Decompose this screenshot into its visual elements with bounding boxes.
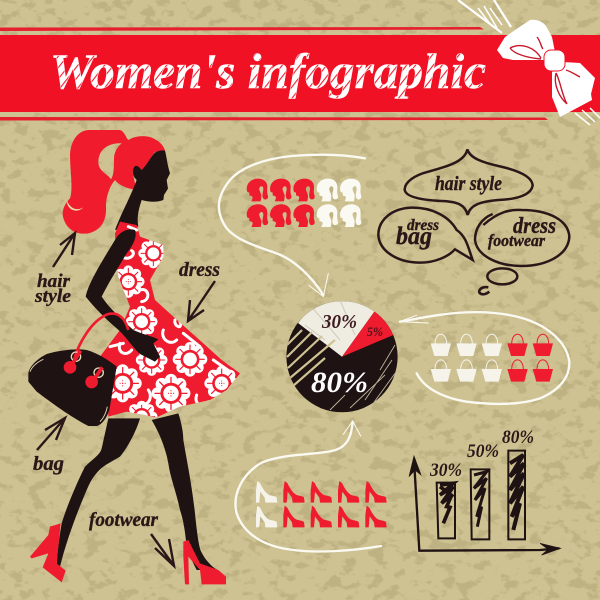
back shoe <box>30 523 66 582</box>
title: Women's infographic <box>50 43 486 99</box>
head neck and body <box>115 150 170 230</box>
hair <box>63 130 165 234</box>
arrow: to bag <box>37 418 65 450</box>
pie label 80%: 80% <box>311 366 368 399</box>
label: footwear: footwear <box>89 509 158 531</box>
bubble text: dress footwear: dress <box>513 213 556 238</box>
bar label 30%: 30% <box>429 460 462 481</box>
arm <box>86 229 160 362</box>
label: hair style <box>34 271 72 307</box>
title banner <box>0 27 600 120</box>
bag icon grid <box>431 334 553 382</box>
thought circle <box>487 268 517 284</box>
front shoe <box>183 540 226 584</box>
dress <box>100 222 240 417</box>
bar 80% <box>508 451 525 539</box>
shoe icon grid <box>256 481 387 527</box>
arrow: bags to pie <box>399 312 569 404</box>
bar chart <box>409 451 561 555</box>
hair highlight <box>67 200 83 211</box>
bubble: dress bag <box>378 208 473 263</box>
bubble: hair style <box>405 149 533 215</box>
pie chart <box>286 295 400 412</box>
arrow: to footwear <box>151 534 174 566</box>
arrow: to dress <box>188 281 215 321</box>
woman figure <box>28 130 240 584</box>
bubble text: dress footwear: footwear <box>488 231 545 250</box>
handbag <box>28 349 117 426</box>
thought dot <box>479 287 489 294</box>
label: dress: dress <box>179 259 220 281</box>
bubble: dress footwear <box>475 210 569 266</box>
bar label 80%: 80% <box>502 427 534 448</box>
legs <box>57 418 140 567</box>
bar 50% <box>471 469 489 539</box>
icon: bow and ribbon <box>458 0 600 125</box>
label: hair style: hair <box>37 271 71 292</box>
bubble text: hair style: hair style <box>435 173 502 195</box>
pie label 30%: 30% <box>321 311 357 333</box>
bar label 50%: 50% <box>467 441 499 462</box>
pie slice: 5% <box>342 312 394 357</box>
pie slice: 30% <box>298 295 375 357</box>
label: bag: bag <box>33 453 64 475</box>
thought bubbles <box>378 149 569 294</box>
dress pattern <box>104 227 239 433</box>
arrow: shoes to pie <box>236 421 381 551</box>
label: hair style: style <box>34 286 72 307</box>
hair icon grid <box>247 179 361 227</box>
bag handle and fittings <box>30 314 128 422</box>
arrow: hair to pie <box>219 155 365 297</box>
arrow: to hair <box>53 233 75 267</box>
bubble text: dress bag: dress <box>407 217 439 234</box>
bubble text: dress bag: bag <box>396 223 432 250</box>
bubble text: dress footwear <box>488 213 556 250</box>
bar 30% <box>437 483 455 538</box>
pie label 5%: 5% <box>367 324 383 339</box>
chart axes <box>409 456 561 555</box>
